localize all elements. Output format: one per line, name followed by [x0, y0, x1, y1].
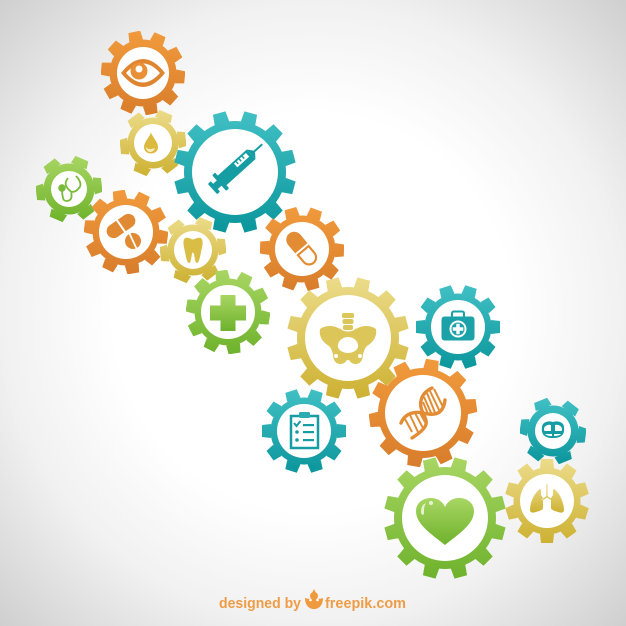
icon: clipboard	[291, 412, 318, 448]
icon: capsule	[283, 229, 320, 268]
icon: pelvis	[320, 313, 376, 364]
icon: stethoscope	[59, 176, 80, 201]
gear: stethoscope	[36, 156, 102, 222]
footer credit	[219, 589, 406, 612]
gear: pelvis	[287, 277, 409, 399]
gear: clipboard	[262, 389, 346, 473]
gear: green cross	[186, 270, 270, 354]
gear: brain	[520, 398, 586, 464]
gear: blood drop	[120, 110, 186, 176]
icon: tooth	[183, 238, 203, 263]
icon: medical kit	[442, 312, 474, 340]
footer credit: freepik.com	[325, 595, 406, 612]
gear: heart	[384, 457, 506, 579]
icon: DNA	[401, 388, 445, 438]
gear: medical kit	[416, 285, 500, 369]
icon: green cross	[210, 295, 246, 331]
icon: brain	[542, 421, 564, 438]
gear: capsule	[260, 207, 344, 291]
icon: freepik logo	[305, 589, 323, 609]
gear: syringe	[174, 111, 296, 233]
gear: lungs	[505, 459, 589, 543]
gear: tooth	[160, 217, 226, 283]
icon: lungs	[530, 484, 564, 513]
icon: eye	[121, 59, 165, 87]
gear: DNA	[369, 359, 477, 467]
icon: syringe	[205, 136, 269, 197]
icon: pills	[103, 210, 141, 250]
icon: blood drop	[144, 132, 158, 154]
icon: heart	[416, 498, 474, 545]
footer credit: designed by	[219, 595, 302, 612]
gear: eye	[101, 31, 185, 115]
gear: pills	[84, 190, 168, 274]
